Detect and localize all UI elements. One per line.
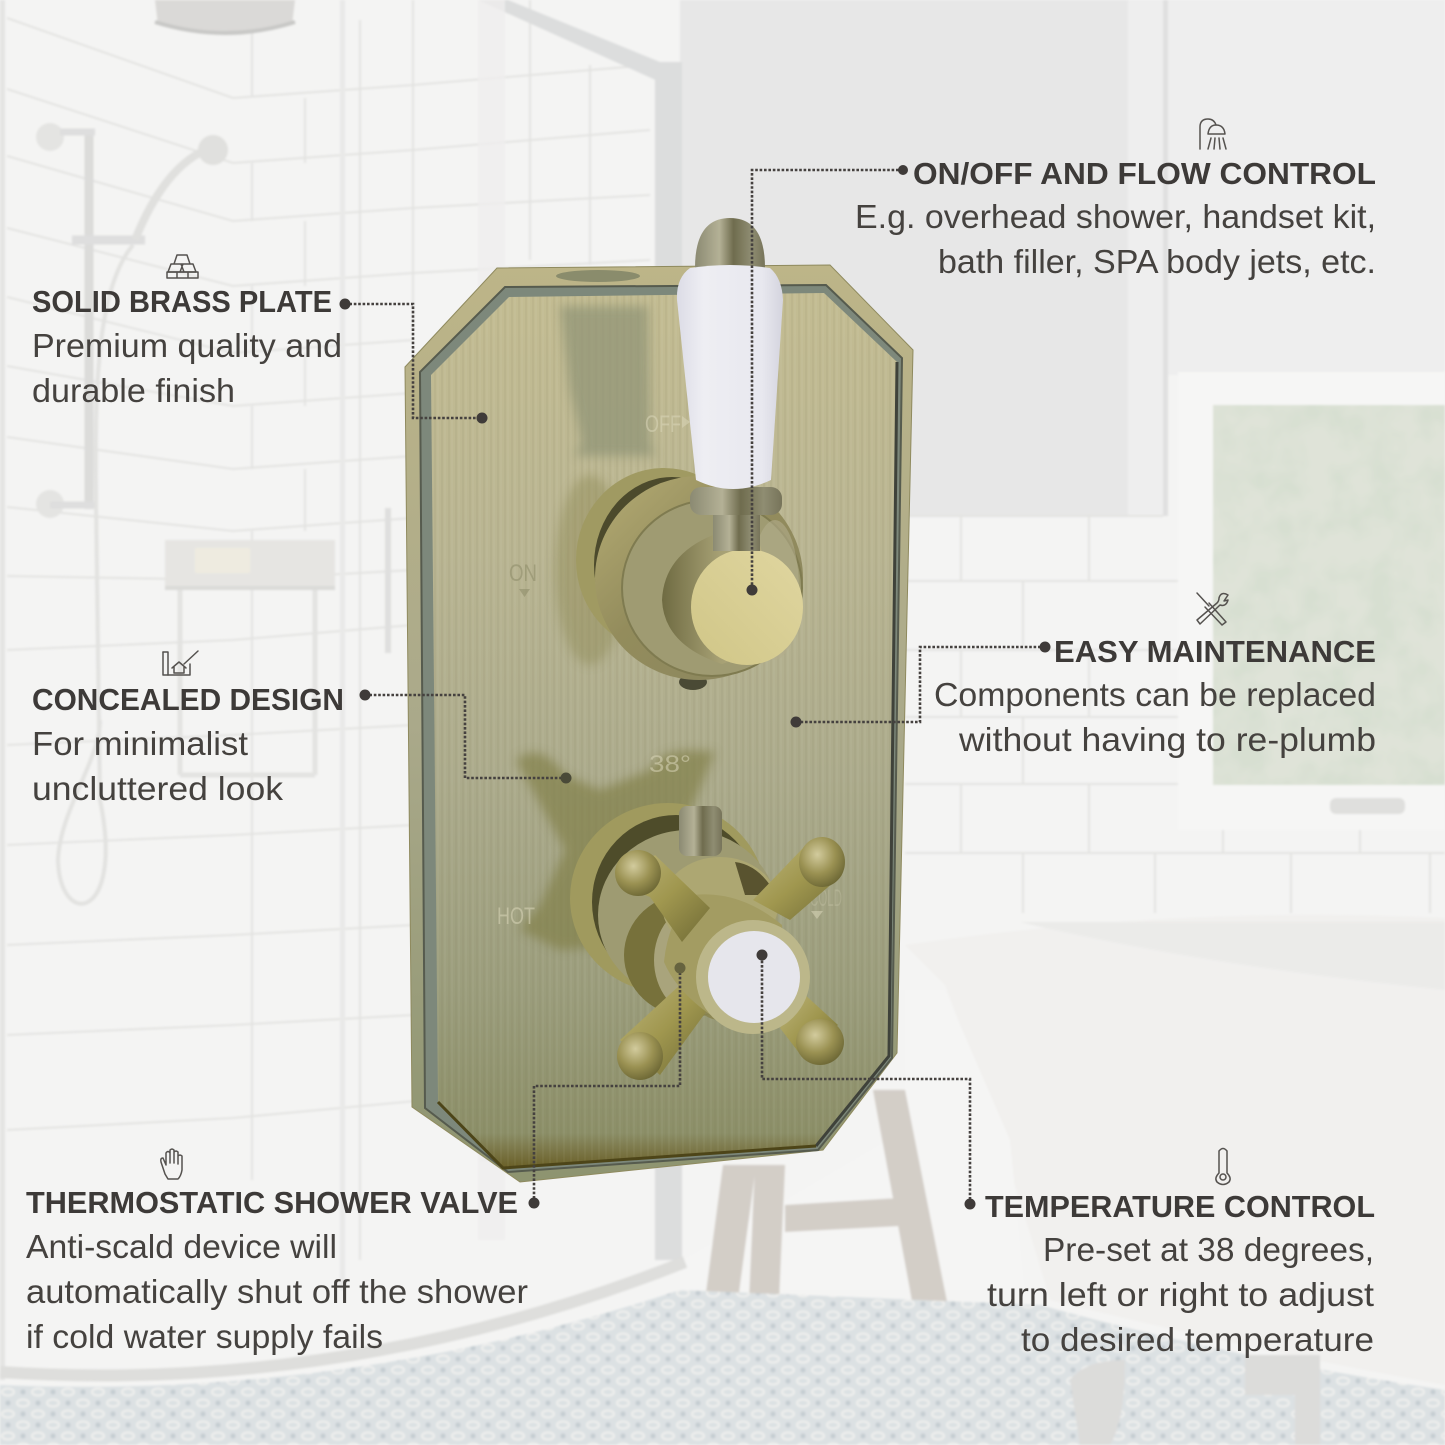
panel: thermostatic shower valve — [26, 1149, 528, 1355]
lower control: temperature cross handle — [570, 803, 845, 1080]
valve plate — [405, 265, 913, 1182]
icon: house on plan — [163, 651, 198, 675]
plate engravings: ON — [509, 560, 537, 587]
rear wall — [680, 0, 1445, 516]
tub — [680, 915, 1445, 1385]
product: thermostatic valve — [405, 218, 913, 1182]
plate engravings: HOT — [497, 903, 535, 930]
panel: temperature control: to desired temperature — [1021, 1321, 1374, 1358]
panel: thermostatic shower valve: Anti-scald device will — [26, 1228, 337, 1265]
panel: easy maintenance: Components can be replaced — [934, 676, 1376, 713]
patterned floor — [0, 1290, 1445, 1445]
panel: temperature control: TEMPERATURE CONTROL — [985, 1189, 1375, 1224]
plate engravings — [497, 411, 842, 930]
lever handle: ceramic — [677, 265, 783, 489]
panel: on/off and flow control — [855, 119, 1376, 280]
plate engravings: OFF — [645, 411, 681, 438]
panel: on/off and flow control: E.g. overhead shower, handset kit, — [855, 198, 1376, 235]
leader: thermostatic shower valve — [528, 962, 686, 1208]
panel: concealed design — [32, 651, 344, 807]
wall tiles right — [905, 516, 1445, 913]
arms — [753, 845, 842, 920]
icon: wrench and screwdriver — [1197, 593, 1228, 625]
leader: temperature control — [756, 950, 976, 1210]
shower tiles — [7, 0, 480, 1260]
reflections on plate — [516, 306, 715, 950]
panel: solid brass plate: Premium quality and — [32, 327, 342, 364]
panel: concealed design: CONCEALED DESIGN — [32, 682, 344, 717]
icon: brass bars — [167, 255, 198, 278]
rain head and rail — [36, 0, 391, 904]
panel: on/off and flow control: ON/OFF AND FLOW CONTROL — [913, 156, 1376, 191]
leader: concealed design — [360, 690, 572, 784]
panel: temperature control — [985, 1148, 1375, 1358]
icon: thermometer — [1216, 1148, 1230, 1184]
panel: temperature control: Pre-set at 38 degrees, — [1043, 1231, 1374, 1268]
leader: easy maintenance — [790, 642, 1050, 728]
panel: solid brass plate: SOLID BRASS PLATE — [32, 284, 332, 319]
upper control: on/off lever — [576, 218, 803, 690]
leader: on/off and flow control — [746, 165, 908, 596]
panel: solid brass plate — [32, 255, 342, 409]
stool — [705, 1090, 950, 1346]
leader: solid brass plate — [340, 298, 488, 424]
glass frame — [0, 0, 682, 1380]
icon: hand — [161, 1149, 182, 1179]
panel: concealed design: uncluttered look — [32, 770, 284, 807]
panel: concealed design: For minimalist — [32, 725, 248, 762]
panel: thermostatic shower valve: automatically shut off the shower — [26, 1273, 528, 1310]
panel: easy maintenance — [934, 593, 1376, 758]
product: thermostatic valve: COLD — [810, 885, 842, 912]
panel: temperature control: turn left or right to adjust — [987, 1276, 1374, 1313]
ceramic temperature disc — [696, 920, 810, 1034]
panel: easy maintenance: EASY MAINTENANCE — [1054, 634, 1376, 669]
panel: solid brass plate: durable finish — [32, 372, 235, 409]
panel: thermostatic shower valve: THERMOSTATIC SHOWER VALVE — [26, 1185, 518, 1220]
window — [1178, 372, 1445, 830]
plate engravings: 38° — [649, 751, 691, 778]
shower tray — [0, 1262, 685, 1375]
panel: on/off and flow control: bath filler, SPA body jets, etc. — [938, 243, 1376, 280]
panel: thermostatic shower valve: if cold water supply fails — [26, 1318, 383, 1355]
panel: easy maintenance: without having to re-plumb — [958, 721, 1376, 758]
icon: shower head — [1200, 119, 1226, 149]
